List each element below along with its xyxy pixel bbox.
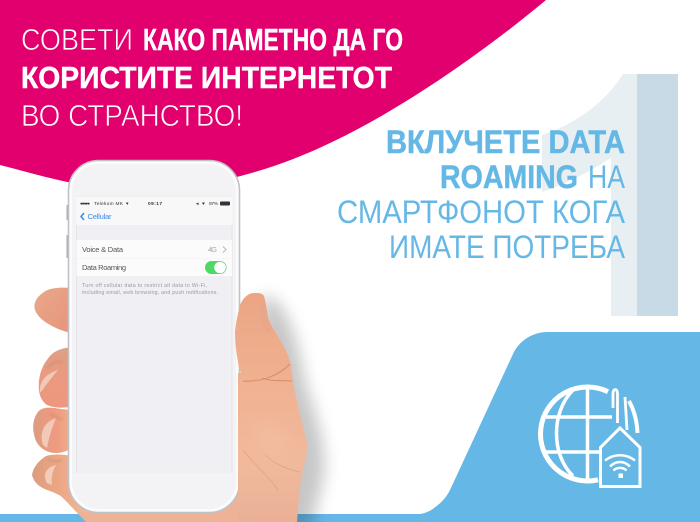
status bar	[80, 201, 230, 207]
heading: tip 1: ИМАТЕ ПОТРЕБА	[389, 229, 626, 265]
status bar: ◂	[196, 202, 199, 207]
finger tip behind phone right edge	[238, 410, 244, 428]
title: КАКО ПАМЕТНО ДА ГО	[143, 22, 403, 57]
status bar: ♥	[202, 202, 205, 207]
ring finger	[33, 408, 72, 453]
palm behind phone	[60, 400, 297, 522]
thumb crease	[243, 364, 292, 381]
settings row: data roaming	[76, 258, 232, 276]
hand shadow	[250, 295, 324, 522]
status bar: ●●●●●	[80, 201, 90, 206]
ring fingernail	[42, 418, 56, 448]
middle fingernail	[40, 370, 58, 392]
toggle	[205, 261, 226, 274]
heading: tip 1: СМАРТФОНОТ КОГА	[337, 194, 626, 230]
settings row: voice and data: 4G	[208, 245, 217, 254]
status bar: 09:17	[148, 201, 162, 207]
settings row: data roaming: Data Roaming	[82, 263, 126, 272]
knuckle marks	[48, 361, 62, 461]
screen edge lines	[76, 224, 232, 473]
settings note: including email, web browsing, and push notifications.	[82, 290, 218, 296]
middle finger	[39, 347, 72, 408]
settings row: voice and data: Voice & Data	[82, 245, 124, 254]
palm lines	[243, 450, 300, 490]
screen	[76, 195, 232, 473]
little fingernail	[45, 465, 56, 485]
thumb nail	[260, 296, 271, 334]
heading: tip 1: НА	[588, 159, 626, 195]
phone body	[68, 160, 240, 512]
title: СОВЕТИ	[21, 22, 133, 57]
heading: tip 1: ВКЛУЧЕТЕ DATA	[386, 124, 625, 160]
phone	[66, 160, 240, 512]
blue corner panel	[0, 332, 700, 522]
heading: tip 1	[337, 124, 626, 265]
fingers behind phone	[32, 288, 297, 522]
hand: thumb and palm over phone edge	[235, 293, 307, 522]
title: ВО СТРАНСТВО!	[21, 98, 243, 133]
status bar: Telekom MK	[94, 201, 124, 207]
nav bar	[76, 197, 232, 225]
index finger	[34, 288, 72, 333]
icon: globe with wifi tag	[540, 387, 640, 486]
settings note: Turn off cellular data to restrict all data to Wi-Fi,	[82, 283, 207, 289]
bezel	[72, 164, 236, 509]
side buttons	[66, 205, 68, 258]
settings row: voice and data	[76, 240, 232, 258]
status bar: 97%	[209, 201, 219, 207]
heading: tip 1: ROAMING	[440, 159, 578, 195]
little finger	[32, 454, 90, 512]
pink header shape	[0, 0, 546, 190]
settings note	[82, 283, 218, 296]
numeral 1 decoration	[542, 74, 678, 316]
back link: Cellular	[88, 212, 112, 221]
palm highlight	[258, 420, 290, 455]
status bar: ▾	[126, 202, 129, 207]
title	[21, 22, 403, 133]
title: КОРИСТИТЕ ИНТЕРНЕТОТ	[21, 60, 392, 95]
